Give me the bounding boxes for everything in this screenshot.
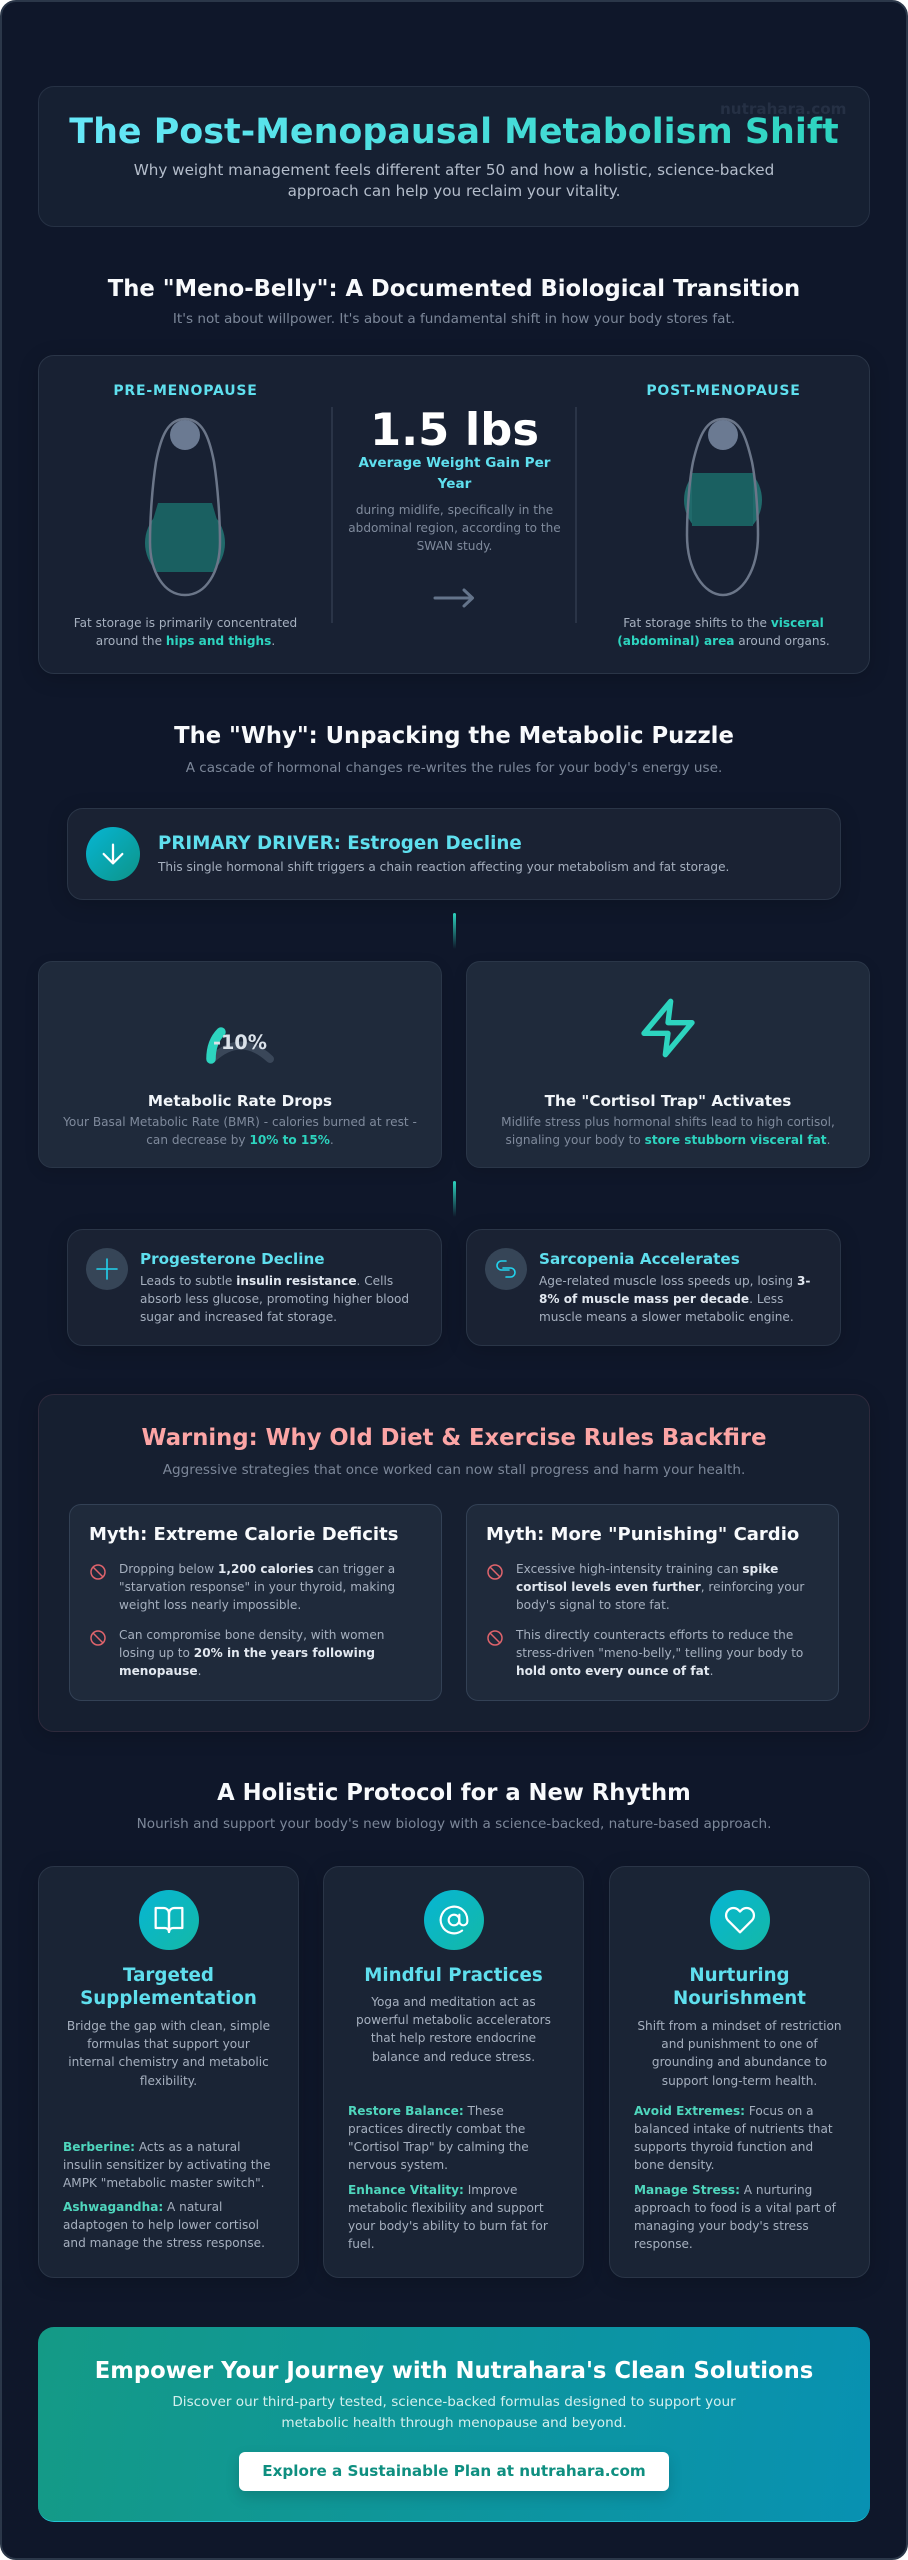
- enhance vitality: fuel.: [348, 2237, 375, 2251]
- ban icon: [90, 1564, 106, 1580]
- heading: meno-belly: The "Meno-Belly": A Documented Biological Transition: [108, 276, 800, 302]
- stat: 1.5 lbs: 1.5 lbs: [370, 403, 539, 456]
- myth point: weight loss nearly impossible.: [119, 1598, 301, 1612]
- ban icon: [90, 1630, 106, 1646]
- manage stress: [634, 2182, 836, 2251]
- primary driver text: This single hormonal shift triggers a chain reaction affecting your metabolism and fat storage.: [158, 860, 729, 874]
- icon: post-menopause body: [684, 419, 762, 595]
- card title: Supplementation: [80, 1988, 257, 2009]
- card description: [356, 1995, 551, 2064]
- enhance vitality: your body's ability to burn fat for: [348, 2219, 548, 2233]
- panel: nurturing nourishment: [609, 1866, 870, 2278]
- icon: open book: [139, 1890, 199, 1950]
- card description: Shift from a mindset of restriction: [637, 2019, 842, 2033]
- stat description: SWAN study.: [417, 539, 492, 553]
- card description: grounding and abundance to: [652, 2055, 827, 2069]
- avoid extremes: [634, 2104, 833, 2172]
- panel: primary driver: [67, 808, 841, 900]
- avoid extremes: supports thyroid function and: [634, 2140, 813, 2154]
- myth point: This directly counteracts efforts to reduce the: [516, 1628, 793, 1642]
- card description: flexibility.: [140, 2074, 197, 2088]
- subheading: why: A cascade of hormonal changes re-writes the rules for your body's energy use.: [186, 760, 722, 776]
- card description: and punishment to one of: [661, 2037, 818, 2051]
- ashwagandha: and manage the stress response.: [63, 2236, 265, 2250]
- manage stress: managing your body's stress: [634, 2219, 809, 2233]
- cta text: metabolic health through menopause and beyond.: [281, 2415, 627, 2431]
- myth card: punishing cardio: [466, 1504, 839, 1701]
- card description: [67, 2019, 270, 2088]
- panel: metabolic rate: [38, 961, 442, 1168]
- subtitle: Why weight management feels different after 50 and how a holistic, science-backed: [134, 161, 774, 179]
- subheading: meno-belly: It's not about willpower. It's about a fundamental shift in how your body stores fat.: [173, 311, 735, 327]
- myth point: stress-driven "meno-belly," telling your body to: [516, 1646, 803, 1660]
- enhance vitality: Enhance Vitality: Improve: [348, 2182, 517, 2196]
- cortisol text: Midlife stress plus hormonal shifts lead to high cortisol,: [501, 1115, 835, 1129]
- progesterone title: Progesterone Decline: [140, 1250, 325, 1268]
- icon: heart: [710, 1890, 770, 1950]
- myth point: menopause.: [119, 1664, 201, 1678]
- connector: [452, 913, 456, 949]
- panel: call to action: [38, 2327, 870, 2522]
- icon: at sign: [424, 1890, 484, 1950]
- sarcopenia text: Age-related muscle loss speeds up, losing 3-: [539, 1274, 810, 1288]
- panel: progesterone: [67, 1229, 442, 1346]
- post-menopause caption: (abdominal) area around organs.: [617, 634, 830, 648]
- card title: [673, 1964, 806, 2009]
- myth point: body's signal to store fat.: [516, 1598, 670, 1612]
- berberine: Berberine: Acts as a natural: [63, 2140, 240, 2154]
- restore balance: "Cortisol Trap" by calming the: [348, 2140, 529, 2154]
- card description: that help restore endocrine: [371, 2031, 536, 2045]
- stat label: Year: [438, 476, 471, 492]
- restore balance: Restore Balance: These: [348, 2104, 504, 2118]
- ashwagandha: adaptogen to help lower cortisol: [63, 2218, 259, 2232]
- stat description: [348, 503, 561, 553]
- card title: [80, 1964, 257, 2009]
- myth point: Can compromise bone density, with women: [119, 1628, 384, 1642]
- card description: [637, 2019, 842, 2088]
- sarcopenia title: Sarcopenia Accelerates: [539, 1250, 740, 1268]
- restore balance: practices directly combat the: [348, 2122, 525, 2136]
- manage stress: response.: [634, 2237, 693, 2251]
- card description: Bridge the gap with clean, simple: [67, 2019, 270, 2033]
- pre-menopause label: PRE-MENOPAUSE: [113, 383, 258, 399]
- myth point: cortisol levels even further, reinforcing your: [516, 1580, 804, 1594]
- card title: Targeted: [123, 1964, 214, 1986]
- progesterone text: absorb less glucose, promoting higher blood: [140, 1292, 409, 1306]
- panel: targeted supplementation: [38, 1866, 299, 2278]
- icon: lightning bolt: [641, 998, 695, 1058]
- myth point: Dropping below 1,200 calories can trigger a: [119, 1562, 395, 1576]
- enhance vitality: metabolic flexibility and support: [348, 2201, 544, 2215]
- myth card: calorie deficits: [69, 1504, 442, 1701]
- card description: formulas that support your: [87, 2037, 250, 2051]
- enhance vitality: [348, 2182, 548, 2251]
- ashwagandha: Ashwagandha: A natural: [63, 2200, 222, 2214]
- card description: internal chemistry and metabolic: [68, 2055, 269, 2069]
- progesterone text: sugar and increased fat storage.: [140, 1310, 337, 1324]
- subtitle: [134, 161, 774, 200]
- heading: protocol: A Holistic Protocol for a New Rhythm: [217, 1780, 691, 1806]
- icon: pre-menopause body: [145, 419, 225, 595]
- pre-menopause caption: Fat storage is primarily concentrated: [74, 616, 297, 630]
- icon: plus: [86, 1248, 128, 1290]
- myth title: Myth: Extreme Calorie Deficits: [89, 1524, 398, 1545]
- card description: powerful metabolic accelerators: [356, 2013, 551, 2027]
- post-menopause label: POST-MENOPAUSE: [646, 383, 801, 399]
- cta text: [172, 2394, 736, 2431]
- stat description: abdominal region, according to the: [348, 521, 561, 535]
- cortisol text: [501, 1115, 835, 1147]
- card description: Yoga and meditation act as: [371, 1995, 536, 2009]
- cta text: Discover our third-party tested, science-backed formulas designed to support your: [172, 2394, 736, 2410]
- card title: Nourishment: [673, 1988, 806, 2009]
- berberine: [63, 2140, 271, 2190]
- stat label: Average Weight Gain Per: [358, 455, 550, 471]
- primary driver title: PRIMARY DRIVER: Estrogen Decline: [158, 833, 522, 854]
- panel: mindful practices: [323, 1866, 584, 2278]
- myth point: [119, 1562, 395, 1612]
- stat description: during midlife, specifically in the: [356, 503, 553, 517]
- card description: support long-term health.: [662, 2074, 817, 2088]
- watermark: nutrahara.com: [720, 100, 846, 118]
- avoid extremes: Avoid Extremes: Focus on a: [634, 2104, 814, 2118]
- berberine: AMPK "metabolic master switch".: [63, 2176, 265, 2190]
- connector: [452, 1181, 456, 1217]
- myth point: [119, 1628, 384, 1678]
- panel: meno-belly comparison: [38, 355, 870, 674]
- myth point: losing up to 20% in the years following: [119, 1646, 375, 1660]
- subtitle: approach can help you reclaim your vitality.: [288, 182, 620, 200]
- pre-menopause caption: [74, 616, 297, 648]
- warning title: Warning: Why Old Diet & Exercise Rules Backfire: [142, 1425, 766, 1451]
- ban icon: [487, 1630, 503, 1646]
- avoid extremes: balanced intake of nutrients that: [634, 2122, 833, 2136]
- metabolic rate title: Metabolic Rate Drops: [148, 1092, 332, 1110]
- card description: balance and reduce stress.: [372, 2050, 535, 2064]
- cortisol text: signaling your body to store stubborn visceral fat.: [506, 1133, 830, 1147]
- manage stress: approach to food is a vital part of: [634, 2201, 836, 2215]
- subheading: protocol: Nourish and support your body's new biology with a science-backed, nature-based approach.: [137, 1816, 771, 1832]
- dividers and body diagrams: [145, 407, 762, 623]
- panel: sarcopenia: [466, 1229, 841, 1346]
- progesterone text: [140, 1274, 409, 1324]
- post-menopause caption: [617, 616, 830, 648]
- ban icon: [487, 1564, 503, 1580]
- icon: arrow down: [86, 827, 140, 881]
- myth point: [516, 1628, 803, 1678]
- cortisol title: The "Cortisol Trap" Activates: [545, 1092, 791, 1110]
- panel: cortisol trap: [466, 961, 870, 1168]
- myth point: "starvation response" in your thyroid, making: [119, 1580, 395, 1594]
- warning subtitle: Aggressive strategies that once worked can now stall progress and harm your health.: [163, 1462, 745, 1478]
- sarcopenia text: [539, 1274, 810, 1324]
- cta button: [239, 2452, 669, 2491]
- heading: why: The "Why": Unpacking the Metabolic Puzzle: [174, 723, 734, 749]
- cta title: Empower Your Journey with Nutrahara's Clean Solutions: [95, 2358, 813, 2384]
- icon: linked loops: [485, 1248, 527, 1290]
- myth point: hold onto every ounce of fat.: [516, 1664, 713, 1678]
- pre-menopause caption: around the hips and thighs.: [96, 634, 275, 648]
- card title: Nurturing: [689, 1964, 790, 1986]
- gauge value: -10%: [213, 1031, 267, 1054]
- berberine: insulin sensitizer by activating the: [63, 2158, 271, 2172]
- card title: Mindful Practices: [364, 1964, 543, 1986]
- arrow: transition: [435, 590, 472, 606]
- restore balance: [348, 2104, 529, 2172]
- metabolic rate text: can decrease by 10% to 15%.: [146, 1133, 334, 1147]
- sarcopenia text: 8% of muscle mass per decade. Less: [539, 1292, 783, 1306]
- panel: warning: [38, 1394, 870, 1732]
- metabolic rate text: [63, 1115, 417, 1147]
- restore balance: nervous system.: [348, 2158, 448, 2172]
- title: The Post-Menopausal Metabolism Shift: [69, 112, 839, 152]
- cta button: Explore a Sustainable Plan at nutrahara.com: [262, 2462, 646, 2480]
- progesterone text: Leads to subtle insulin resistance. Cells: [140, 1274, 393, 1288]
- gauge: [206, 1027, 274, 1064]
- panel: header: [38, 86, 870, 227]
- myth point: [516, 1562, 804, 1612]
- manage stress: Manage Stress: A nurturing: [634, 2182, 812, 2196]
- stat label: [358, 455, 550, 492]
- metabolic rate text: Your Basal Metabolic Rate (BMR) - calories burned at rest -: [63, 1115, 417, 1129]
- avoid extremes: bone density.: [634, 2158, 714, 2172]
- post-menopause caption: Fat storage shifts to the visceral: [623, 616, 824, 630]
- myth point: Excessive high-intensity training can spike: [516, 1562, 778, 1576]
- myth title: Myth: More "Punishing" Cardio: [486, 1524, 799, 1545]
- sarcopenia text: muscle means a slower metabolic engine.: [539, 1310, 794, 1324]
- ashwagandha: [63, 2200, 265, 2250]
